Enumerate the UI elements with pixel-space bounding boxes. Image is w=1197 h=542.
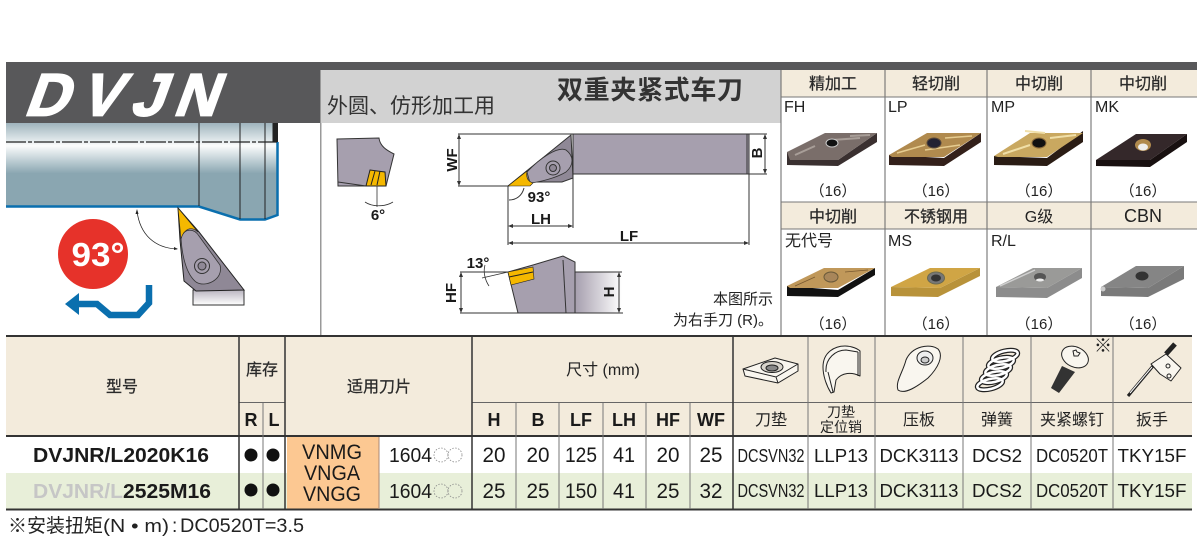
insert codes: 无代号 — [785, 232, 833, 250]
table backgrounds — [6, 337, 1192, 509]
dimension lines — [457, 134, 767, 313]
title: DVJN series name: D — [18, 62, 86, 129]
row 2: DVJNR/L2525M16: 32 — [700, 480, 722, 503]
row 1: DVJNR/L2020K16: DCSVN32 — [738, 446, 804, 466]
applicable insert types: VNMG — [302, 441, 362, 464]
insert quantity labels: （16） — [1120, 316, 1166, 333]
table headings: 尺寸 (mm) — [566, 361, 640, 379]
subtitle band — [321, 70, 781, 123]
table headings: 适用刀片 — [347, 378, 411, 396]
applicable insert types — [302, 441, 362, 506]
insert codes: MS — [888, 233, 912, 250]
dimension labels: 93° — [528, 189, 550, 206]
feed direction arrow — [65, 285, 149, 315]
icon: spring — [976, 348, 1019, 392]
row 1: DVJNR/L2020K16: 20 — [526, 444, 550, 467]
footnote — [8, 515, 304, 537]
footnote: ※安装扭矩 — [8, 515, 103, 537]
table headings: 刀垫 — [755, 411, 787, 429]
insert header row 1 — [809, 75, 1167, 93]
row 2: DVJNR/L2525M16: 41 — [613, 480, 635, 503]
93 degree badge — [58, 219, 128, 289]
icon: locating pin — [823, 346, 860, 393]
dimension labels: H — [601, 287, 618, 297]
insert codes: LP — [888, 99, 908, 116]
dimension labels: LH — [531, 211, 551, 228]
insert header row 2: G级 — [1025, 208, 1053, 226]
table headings: 扳手 — [1136, 410, 1168, 429]
front view drawing with 6 degree: 6° — [371, 207, 385, 224]
insert: no code — [787, 268, 875, 297]
title: DVJN series name: N — [167, 62, 235, 129]
row 2: DVJNR/L2525M16: DCSVN32 — [738, 481, 804, 501]
insert quantity labels: （16） — [913, 183, 959, 200]
table headings: 定位销 — [820, 419, 862, 435]
applicable insert types: VNGA — [304, 462, 360, 485]
insert header row 2: 中切削 — [809, 208, 857, 226]
table headings: B — [532, 410, 544, 430]
title: DVJN series name: V — [73, 62, 137, 129]
row 1: DVJNR/L2020K16: 125 — [565, 444, 597, 467]
row 2: DVJNR/L2525M16: DC0520T — [1036, 481, 1108, 501]
front view drawing with 6 degree — [337, 138, 394, 224]
insert: LP — [889, 133, 981, 166]
insert quantity labels — [810, 183, 1166, 333]
table headings — [106, 361, 1168, 435]
row 1: DVJNR/L2020K16: 1604 — [389, 445, 432, 467]
dimension labels: HF — [443, 283, 460, 303]
insert codes: FH — [784, 99, 805, 116]
icon: seat — [743, 358, 798, 383]
panel: insert types — [781, 70, 1197, 336]
row 2: DVJNR/L2525M16: 2525M16 — [123, 481, 211, 503]
row 1: DVJNR/L2020K16: DCK3113 — [880, 446, 958, 466]
insert quantity labels: （16） — [1016, 316, 1062, 333]
footnote: : — [172, 516, 177, 537]
row 1: DVJNR/L2020K16: 20 — [656, 444, 680, 467]
insert codes — [784, 99, 1119, 250]
row 2: DVJNR/L2525M16: 150 — [565, 480, 597, 503]
insert codes: MK — [1095, 99, 1119, 116]
insert codes: R/L — [991, 233, 1016, 250]
row 1: DVJNR/L2020K16: DCS2 — [972, 446, 1022, 466]
row 2: DVJNR/L2525M16: 25 — [526, 480, 550, 503]
insert: FH — [787, 133, 877, 166]
table headings: 型号 — [106, 378, 138, 396]
row 2: DVJNR/L2525M16: TKY15F — [1118, 481, 1186, 501]
row 1: DVJNR/L2020K16 — [33, 444, 1186, 467]
row 2: DVJNR/L2525M16: 25 — [482, 480, 506, 503]
title: DVJN series name — [18, 62, 235, 129]
row 1: DVJNR/L2020K16: TKY15F — [1118, 446, 1186, 466]
heading: 双重夹紧式车刀 — [557, 75, 743, 105]
insert: MS — [891, 268, 980, 297]
row 2: DVJNR/L2525M16: DCS2 — [972, 481, 1022, 501]
dimension labels: B — [749, 147, 766, 158]
row 1: DVJNR/L2020K16: 41 — [613, 444, 635, 467]
row 2: DVJNR/L2525M16: 25 — [656, 480, 680, 503]
footnote: (N • m) — [103, 516, 169, 536]
insert quantity labels: （16） — [1120, 183, 1166, 200]
dimension labels: LF — [620, 228, 638, 245]
applicable insert types: VNGG — [303, 483, 361, 506]
dimension labels: WF — [444, 148, 461, 172]
insert holder head — [178, 208, 244, 305]
note: right hand tool — [673, 291, 773, 329]
row 2: DVJNR/L2525M16: DCK3113 — [880, 481, 958, 501]
table headings: L — [268, 410, 280, 430]
top view drawing — [508, 134, 749, 186]
insert: MP — [994, 131, 1083, 166]
table headings: H — [488, 410, 500, 430]
insert quantity labels: （16） — [810, 316, 856, 333]
dimension labels — [443, 147, 766, 303]
table headings: 弹簧 — [981, 410, 1013, 429]
insert: CBN — [1100, 266, 1184, 297]
title: DVJN series name: J — [124, 62, 182, 129]
insert quantity labels: （16） — [810, 183, 856, 200]
insert quantity labels: （16） — [1016, 183, 1062, 200]
insert header row 1: 中切削 — [1119, 75, 1167, 93]
93 degree badge: 93° — [72, 236, 124, 273]
insert header row 2 — [809, 206, 1162, 226]
table headings: 夹紧螺钉 — [1040, 411, 1104, 429]
insert header row 2: CBN — [1124, 206, 1162, 226]
icon: wrench — [1128, 344, 1181, 396]
insert header row 1: 中切削 — [1015, 75, 1063, 93]
table headings: R — [244, 410, 258, 430]
icon: clamp — [897, 346, 940, 391]
insert header row 1: 轻切削 — [912, 75, 960, 93]
insert codes: MP — [991, 99, 1015, 116]
table headings: 刀垫 — [827, 404, 855, 420]
insert header row 2: 不锈钢用 — [904, 208, 968, 226]
note: right hand tool: 本图所示 — [713, 291, 773, 308]
row 2: DVJNR/L2525M16: 1604 — [389, 481, 432, 503]
row 1: DVJNR/L2020K16: DC0520T — [1036, 446, 1108, 466]
row 1: DVJNR/L2020K16: DVJNR/L2020K16 — [33, 445, 209, 467]
row 1: DVJNR/L2020K16: 20 — [482, 444, 506, 467]
subheading: 外圆、仿形加工用 — [327, 95, 495, 118]
insert quantity labels: （16） — [913, 316, 959, 333]
header band — [6, 62, 1197, 123]
note mark: ※ — [1094, 336, 1112, 356]
insert header row 1: 精加工 — [809, 75, 857, 93]
table headings: LF — [570, 410, 592, 430]
specification table — [6, 336, 1192, 510]
dimension labels: 13° — [467, 255, 489, 272]
table headings: 库存 — [246, 361, 278, 379]
row 1: DVJNR/L2020K16: LLP13 — [814, 446, 868, 466]
row 2: DVJNR/L2525M16 — [33, 480, 1186, 503]
panel divider — [320, 70, 322, 336]
icon: screw — [1051, 342, 1092, 393]
tool holder bar illustration — [6, 123, 278, 220]
footnote: DC0520T=3.5 — [180, 516, 304, 537]
row 2: DVJNR/L2525M16: DVJNR/L — [33, 481, 123, 503]
table headings: WF — [697, 410, 725, 430]
note: right hand tool: 为右手刀 (R)。 — [673, 312, 773, 329]
insert: MK — [1096, 134, 1187, 167]
row 1: DVJNR/L2020K16: 25 — [700, 444, 722, 467]
table headings: 压板 — [903, 411, 935, 429]
table headings: LH — [612, 410, 636, 430]
row 2: DVJNR/L2525M16: LLP13 — [814, 481, 868, 501]
table grid — [6, 336, 1192, 510]
insert: R/L — [996, 268, 1082, 298]
angle arc — [136, 209, 178, 250]
side view drawing — [482, 256, 622, 313]
table headings: HF — [656, 410, 680, 430]
